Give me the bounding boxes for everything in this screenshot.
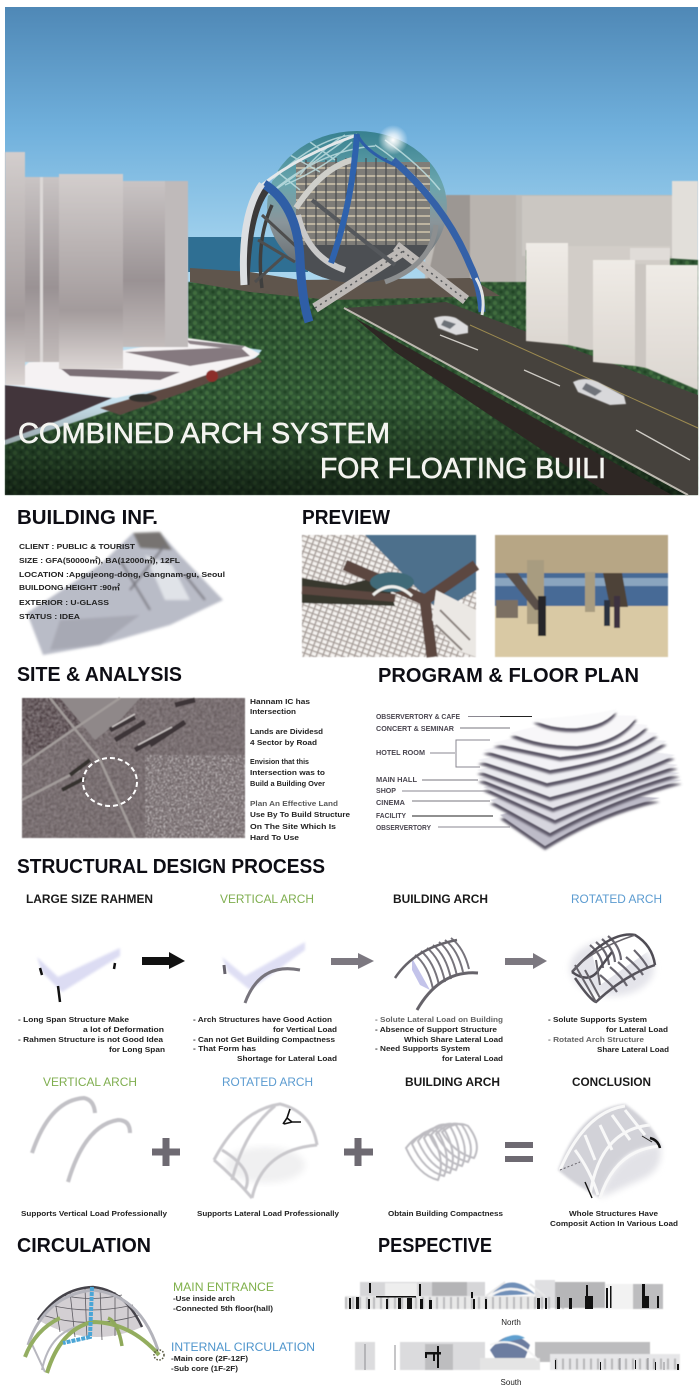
building data text: SIZE : GFA(50000㎡), BA(12000㎡), 12FL [19, 556, 181, 565]
description: - Solute Supports System [548, 1015, 647, 1024]
description [18, 1015, 166, 1054]
step: rotated arch [548, 892, 670, 1054]
site analysis notes: Hannam IC has [250, 697, 310, 706]
icon: coil of ribs [406, 1124, 477, 1180]
floor labels and leaders: HOTEL ROOM [376, 750, 425, 757]
description: Which Share Lateral Load [404, 1035, 504, 1044]
preview image: aerial city view [302, 535, 476, 657]
component: conclusion [550, 1075, 679, 1228]
distant buildings right [425, 181, 698, 290]
icon: rotated arch ribs [570, 932, 655, 1002]
description: - Solute Lateral Load on Building [375, 1015, 504, 1024]
plus sign [344, 1138, 373, 1166]
building data text: BUILDONG HEIGHT :90㎡ [19, 583, 121, 592]
preview image: interior hall [495, 535, 668, 657]
circulation legend: main entrance [173, 1282, 274, 1313]
description: - Absence of Support Structure [375, 1025, 497, 1034]
circulation legend: main entrance: -Connected 5th floor(hall) [173, 1304, 274, 1313]
description: - That Form has [193, 1044, 256, 1053]
stacked floor plates [477, 709, 682, 846]
elevation: north [345, 1280, 663, 1327]
ground with trees [5, 250, 698, 495]
caption: Whole Structures Have [569, 1209, 658, 1218]
plaza [5, 338, 262, 440]
step: large size rahmen [18, 892, 166, 1054]
step: building arch: BUILDING ARCH [393, 892, 488, 906]
circulation legend: main entrance: MAIN ENTRANCE [173, 1282, 274, 1294]
component: vertical arch: Supports Vertical Load Professionally [21, 1209, 168, 1218]
circulation legend: main entrance: -Use inside arch [173, 1294, 236, 1303]
circulation legend: internal circulation: -Sub core (1F-2F) [171, 1364, 239, 1373]
arrow [142, 952, 185, 969]
description: Shortage for Lateral Load [237, 1054, 338, 1063]
floor labels and leaders: CINEMA [376, 800, 405, 807]
elevation: south: South [501, 1378, 521, 1387]
icon: combined structure [558, 1104, 662, 1198]
component: rotated arch [197, 1075, 340, 1218]
component: rotated arch: ROTATED ARCH [222, 1075, 313, 1089]
component: vertical arch: VERTICAL ARCH [43, 1075, 137, 1089]
icon: block with arch [222, 930, 305, 1003]
circulation dome diagram [25, 1287, 164, 1373]
right white blocks [526, 243, 698, 390]
icon: rotated arch frame [214, 1104, 317, 1198]
left towers [5, 152, 188, 385]
elevation: south [355, 1335, 680, 1387]
satellite site map [22, 698, 245, 838]
circulation legend: internal circulation [171, 1342, 315, 1373]
description: a lot of Deformation [83, 1025, 165, 1034]
description: for Vertical Load [273, 1025, 338, 1034]
floor labels and leaders: CONCERT & SEMINAR [376, 726, 454, 733]
heading: perspective: PESPECTIVE [378, 1235, 492, 1257]
step: rotated arch: ROTATED ARCH [571, 892, 662, 906]
car [434, 316, 468, 335]
site analysis notes [250, 697, 350, 842]
site analysis notes: Lands are Dividesd [250, 727, 324, 736]
floor stack diagram [376, 709, 682, 846]
highway [344, 302, 698, 495]
arrow [331, 953, 374, 969]
white front ribs [262, 135, 357, 185]
circulation legend: internal circulation: -Main core (2F-12F) [171, 1354, 249, 1363]
heading: building info: BUILDING INF. [17, 507, 158, 529]
component: conclusion: CONCLUSION [572, 1075, 651, 1089]
description: for Lateral Load [442, 1054, 504, 1063]
dashed site circle [83, 758, 137, 806]
component: building arch [388, 1075, 503, 1218]
X braces [315, 246, 466, 308]
site model image [27, 532, 223, 655]
hero title: COMBINED ARCH SYSTEM [18, 418, 390, 450]
caption: Composit Action In Various Load [550, 1219, 679, 1228]
floor labels and leaders [376, 714, 532, 832]
description: - Can not Get Building Compactness [193, 1035, 335, 1044]
description: - Rotated Arch Structure [548, 1035, 644, 1044]
description: for Long Span [109, 1045, 166, 1054]
floor labels and leaders: MAIN HALL [376, 777, 418, 784]
arrow [505, 953, 547, 969]
building data text: STATUS : IDEA [19, 612, 81, 621]
step: building arch [375, 892, 504, 1063]
circulation legend: internal circulation: INTERNAL CIRCULATION [171, 1342, 315, 1354]
component: vertical arch [21, 1075, 168, 1218]
building data text: CLIENT : PUBLIC & TOURIST [19, 542, 136, 551]
description [193, 1015, 338, 1063]
heading: structural design process: STRUCTURAL DESIGN PROCESS [17, 856, 325, 878]
heading: site and analysis: SITE & ANALYSIS [17, 664, 182, 686]
step: vertical arch: VERTICAL ARCH [220, 892, 314, 906]
hero title [18, 418, 606, 485]
car [573, 379, 626, 405]
elevation: north: North [501, 1318, 521, 1327]
description: Share Lateral Load [597, 1045, 670, 1054]
description: - Arch Structures have Good Action [193, 1015, 333, 1024]
description: - Need Supports System [375, 1044, 470, 1053]
floor labels and leaders: FACILITY [376, 813, 406, 820]
step: large size rahmen: LARGE SIZE RAHMEN [26, 892, 153, 906]
description [548, 1015, 670, 1054]
rear arch dark [246, 188, 268, 285]
component: rotated arch: Supports Lateral Load Professionally [197, 1209, 340, 1218]
icon: building arch ribs [395, 936, 478, 1010]
description: - Long Span Structure Make [18, 1015, 129, 1024]
heading: preview: PREVIEW [302, 507, 390, 529]
floor labels and leaders: OBSERVERTORY [376, 825, 431, 832]
site analysis notes: Envision that this [250, 757, 309, 766]
site analysis notes: Intersection [250, 707, 297, 716]
site analysis notes: Hard To Use [250, 833, 299, 842]
floor labels and leaders: OBSERVERTORY & CAFE [376, 714, 460, 721]
site analysis notes: Use By To Build Structure [250, 810, 350, 819]
hero title: FOR FLOATING BUILI [320, 453, 606, 485]
heading: program and floor plan: PROGRAM & FLOOR PLAN [378, 665, 639, 687]
blue arches [264, 184, 309, 322]
component: building arch: BUILDING ARCH [405, 1075, 500, 1089]
site analysis notes: 4 Sector by Road [250, 738, 318, 747]
description: - Rahmen Structure is not Good Idea [18, 1035, 164, 1044]
site analysis notes: Build a Building Over [250, 779, 325, 788]
building data text: LOCATION :Apgujeong-dong, Gangnam-gu, Seoul [19, 570, 225, 579]
icon: two arches [32, 1098, 130, 1182]
sun glare [378, 125, 408, 155]
panel: building information [19, 532, 225, 655]
site analysis notes: On The Site Which Is [250, 822, 336, 831]
hero rendering: arch building over highway [5, 7, 698, 495]
deck under dome [190, 268, 500, 300]
heading: circulation: CIRCULATION [17, 1235, 151, 1257]
icon: rahmen block [37, 928, 120, 1002]
site analysis notes: Intersection was to [250, 768, 326, 777]
description: for Lateral Load [606, 1025, 669, 1034]
description [375, 1015, 504, 1063]
sea horizon [188, 237, 308, 272]
building data text: EXTERIOR : U-GLASS [19, 598, 109, 607]
component: building arch: Obtain Building Compactness [388, 1209, 503, 1218]
plus sign [152, 1138, 180, 1166]
floor labels and leaders: SHOP [376, 788, 396, 795]
step: vertical arch [193, 892, 338, 1063]
equals sign [505, 1145, 533, 1159]
building data text [19, 542, 225, 621]
site analysis notes: Plan An Effective Land [250, 799, 339, 808]
dome structure [243, 125, 483, 322]
caption [550, 1209, 679, 1228]
